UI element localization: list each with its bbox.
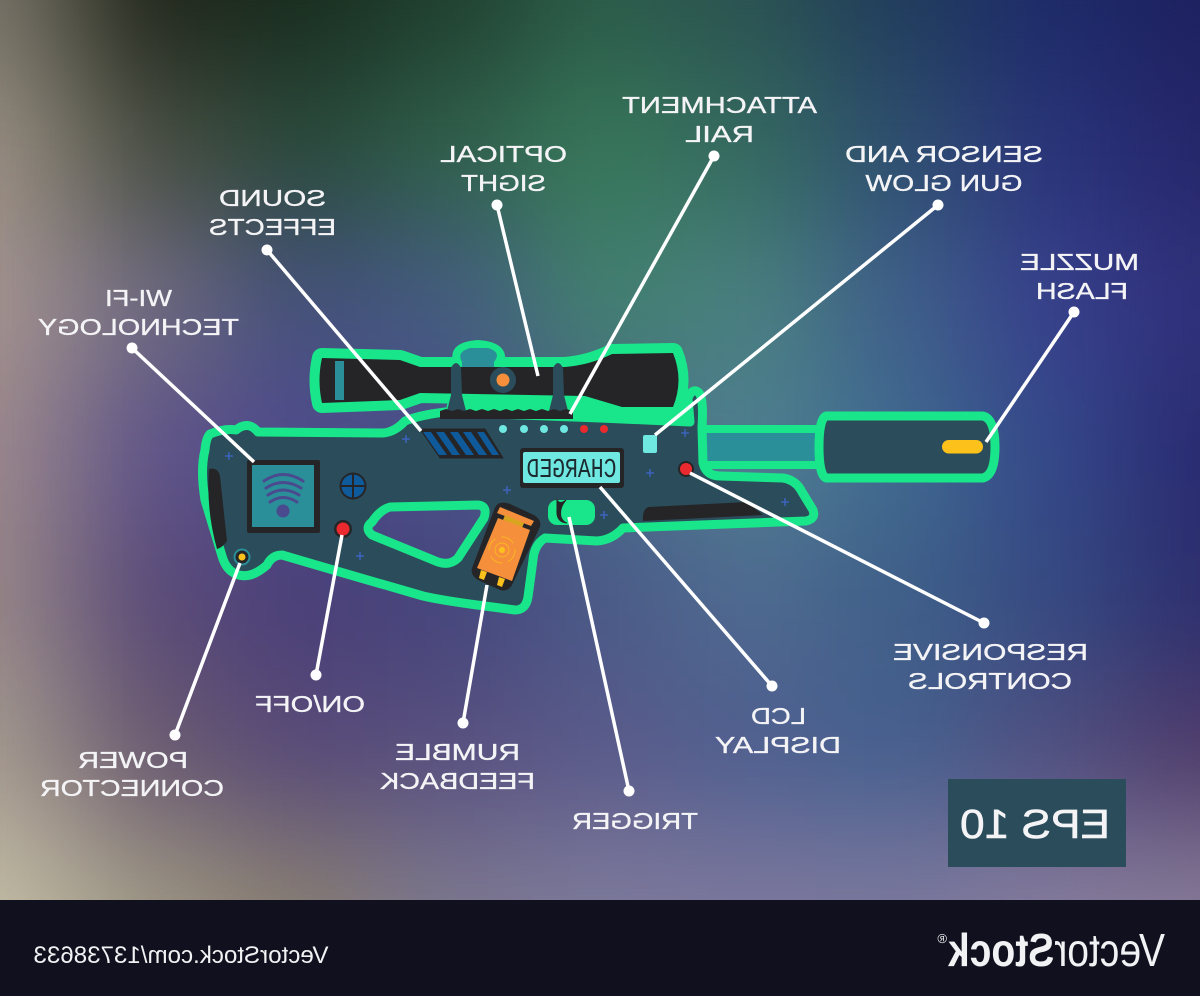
label: trigger: TRIGGER	[572, 808, 698, 834]
eps badge	[948, 779, 1126, 867]
wi-fi callout line	[126, 342, 254, 462]
muzzle flash callout line	[986, 306, 1080, 442]
lcd callout line	[600, 487, 778, 692]
rumble pack	[472, 503, 540, 590]
crosshair dial	[340, 472, 366, 500]
label: optical sight: SIGHT	[461, 170, 546, 196]
laser gun	[202, 340, 995, 610]
attachment rail	[440, 409, 573, 419]
lcd display	[520, 448, 624, 488]
sound effects callout line	[262, 244, 421, 431]
label: power connector: CONNECTOR	[40, 775, 224, 801]
turret	[452, 340, 505, 367]
label: power connector: POWER	[78, 747, 188, 773]
sound vent	[420, 429, 503, 458]
on/off callout line	[310, 535, 342, 680]
label: sound effects	[209, 185, 336, 240]
responsive control button	[678, 461, 694, 477]
sparkle marks	[225, 429, 789, 560]
label: responsive controls	[893, 639, 1088, 694]
trigger	[548, 500, 595, 525]
label: attachment rail: RAIL	[685, 121, 754, 147]
label: attachment rail	[622, 92, 817, 147]
label: wi-fi technology	[38, 285, 239, 340]
label: optical sight	[440, 141, 567, 196]
label: muzzle flash: FLASH	[1036, 278, 1128, 304]
label: power connector	[40, 747, 224, 801]
label: responsive controls: CONTROLS	[908, 668, 1072, 694]
scope mounts	[447, 363, 568, 411]
vectorstock logo: ®	[937, 931, 947, 946]
label: lcd display: DISPLAY	[715, 732, 841, 758]
power connector	[234, 548, 250, 566]
label: rumble feedback: RUMBLE	[395, 739, 520, 765]
attachment rail callout line	[570, 150, 720, 414]
trigger callout line	[569, 517, 634, 796]
label: sensor and gun glow	[845, 141, 1043, 196]
footer bar	[0, 900, 1200, 996]
label: sound effects: SOUND	[219, 185, 326, 211]
label: lcd display	[715, 703, 841, 758]
lcd display: CHARGED	[526, 456, 616, 486]
label: attachment rail: ATTACHMENT	[622, 92, 817, 118]
label: lcd display: LCD	[751, 703, 806, 729]
optical sight callout line	[492, 200, 538, 376]
rumble callout line	[458, 585, 487, 728]
label: sensor and gun glow: SENSOR AND	[845, 141, 1043, 167]
scope lens	[490, 367, 516, 393]
label: rumble feedback: FEEDBACK	[379, 768, 535, 794]
power callout line	[170, 563, 240, 740]
muzzle flash light	[942, 440, 983, 454]
responsive controls callout line	[690, 473, 990, 628]
status lights	[499, 425, 608, 433]
label: muzzle flash	[1020, 249, 1139, 304]
label: wi-fi technology: TECHNOLOGY	[38, 314, 239, 340]
stock grip pad	[208, 469, 227, 549]
vectorstock logo: VectorStock	[948, 924, 1165, 976]
optical sight scope	[320, 340, 678, 407]
callout lines	[126, 150, 1080, 796]
label: responsive controls: RESPONSIVE	[893, 639, 1088, 665]
wi-fi module	[247, 460, 320, 533]
footer url: VectorStock.com/13738633	[34, 942, 328, 969]
sensor callout line	[655, 200, 944, 435]
label: wi-fi technology: WI-FI	[105, 285, 172, 311]
label: sensor and gun glow: GUN GLOW	[865, 170, 1022, 196]
label: rumble feedback	[379, 739, 535, 794]
green backing below scope	[445, 392, 696, 426]
barrel	[690, 416, 995, 478]
gun body	[202, 391, 814, 610]
eps badge: EPS 10	[960, 801, 1110, 847]
label: on/off: ON/OFF	[255, 691, 365, 717]
gun glow sensor	[643, 435, 657, 453]
on/off button	[334, 520, 352, 538]
label: muzzle flash: MUZZLE	[1020, 249, 1139, 275]
handguard dark pad	[643, 502, 763, 521]
label: sound effects: EFFECTS	[209, 214, 336, 240]
label: optical sight: OPTICAL	[440, 141, 567, 167]
